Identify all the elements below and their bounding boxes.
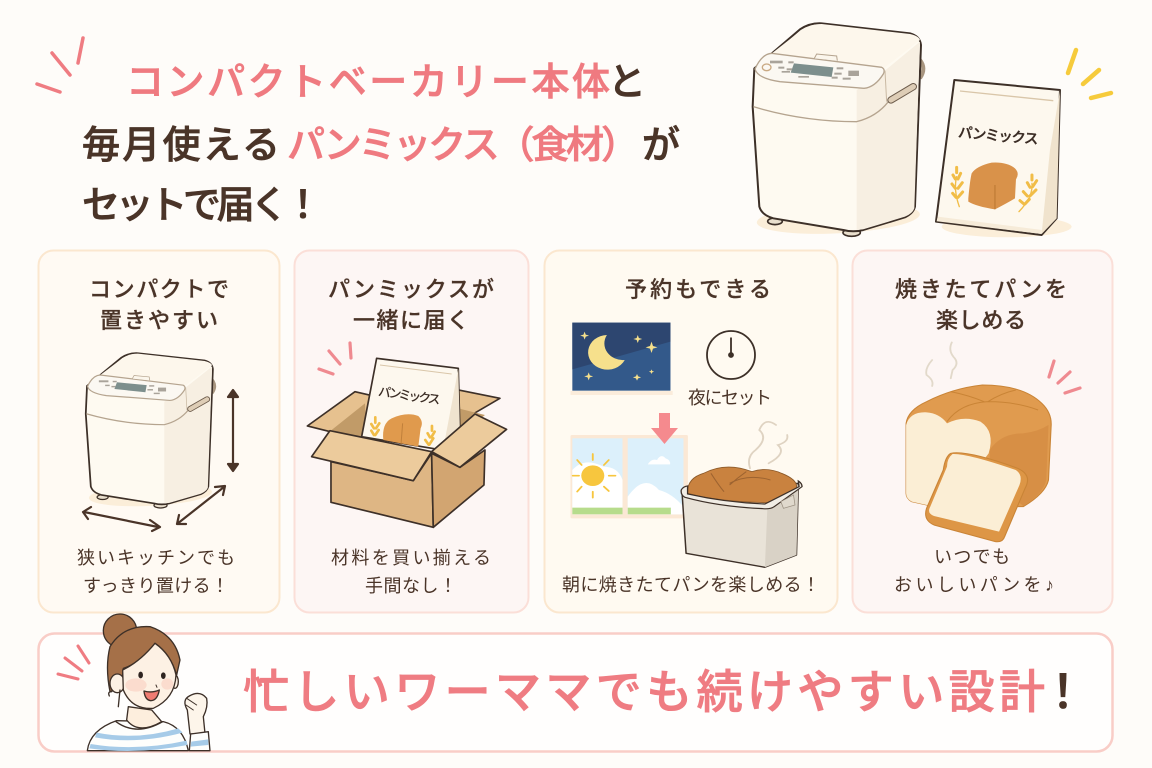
panel: pan mix delivered [294,250,528,612]
illustration: machine with dimensions [86,353,215,509]
banner text: 忙しいワーママでも続けやすい設計 [243,666,1045,718]
illustration: bread pan [681,422,802,567]
caption: compact: 狭いキッチンでも [77,548,235,568]
caption: compact: すっきり置ける！ [83,576,229,596]
title: が [642,125,680,167]
caption: fresh bread: いつでも [934,547,1010,567]
caption: pan mix: 材料を買い揃える [331,548,491,568]
illustration: woman with fist [87,614,210,751]
illustration: box with bag: パンミックス [377,385,441,407]
heading: pan mix: 一緒に届く [353,308,469,333]
title: セットで届く！ [82,185,322,227]
illustration: night sky [570,323,673,395]
panel: fresh bread [852,250,1112,612]
icon: pink burst by title [37,38,83,92]
caption: pan mix: 手間なし！ [365,576,457,596]
illustration: compact bakery machine [753,23,923,238]
heading: fresh bread: 焼きたてパンを [895,277,1067,302]
illustration: loaf and slice [906,342,1051,542]
caption: reservation: 朝に焼きたてパンを楽しめる！ [562,575,820,595]
banner text: ！ [1040,666,1086,718]
title: と [608,62,646,104]
panel: compact [38,250,280,612]
heading: compact: 置きやすい [100,308,218,333]
caption: fresh bread: おいしいパンを♪ [894,575,1054,595]
panel: reservation [544,250,838,612]
icon: pink burst [1049,361,1080,393]
title: 毎月使える [82,125,280,167]
arrow: down [651,413,678,444]
heading: fresh bread: 楽しめる [936,308,1026,333]
icon: pink burst [58,646,89,679]
label: night set: 夜にセット [688,388,772,408]
icon: yellow burst [1068,50,1111,98]
heading: compact: コンパクトで [89,277,229,302]
heading: reservation: 予約もできる [625,277,771,302]
heading: pan mix: パンミックスが [328,277,494,302]
icon: clock [707,331,755,379]
illustration: morning window [570,435,688,518]
arrows: dimensions [83,390,238,531]
icon: pink burst [319,343,351,374]
title: コンパクトベーカリー本体 [126,62,610,104]
title [82,62,680,227]
illustration: pan mix bag: パンミックス [957,124,1039,148]
banner [38,614,1112,752]
illustration: box with bag [307,358,507,527]
illustration: pan mix bag [936,80,1072,237]
title: パンミックス（食材） [287,125,639,167]
